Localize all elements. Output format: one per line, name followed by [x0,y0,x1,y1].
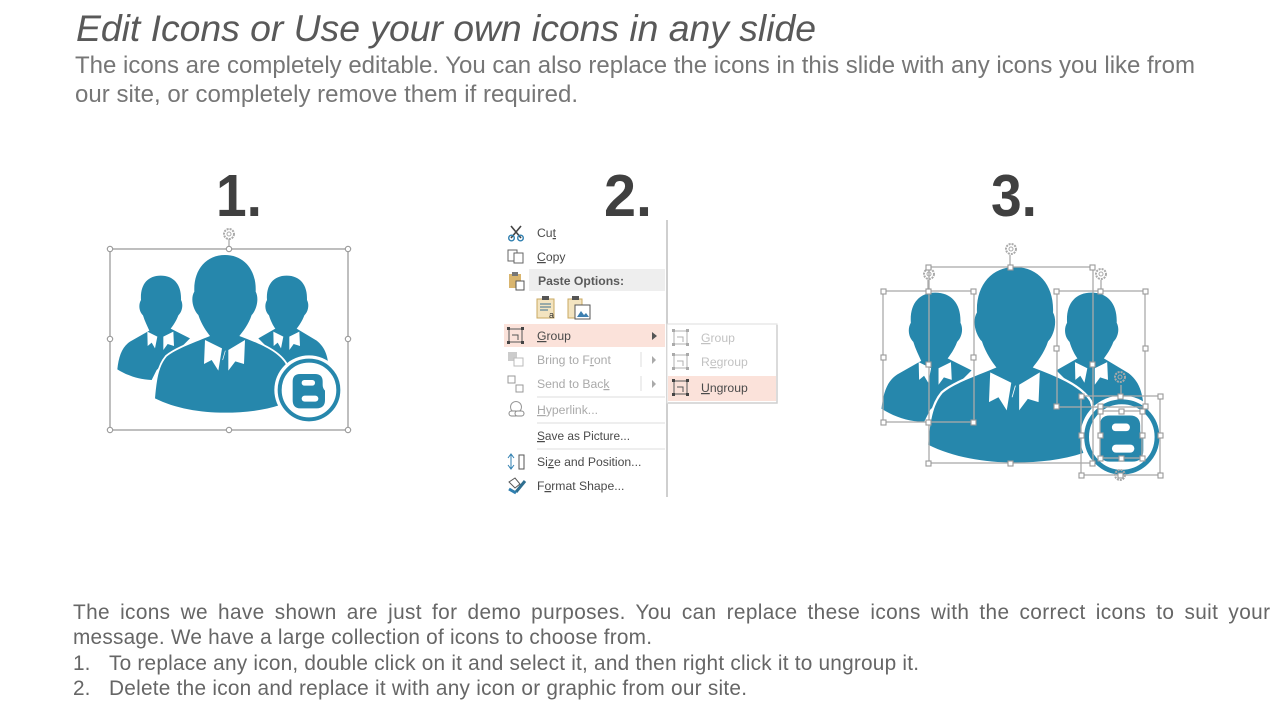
menu item: cut: Cut [537,226,557,240]
step number 1: 1. [216,163,262,229]
instructions text block: The icons we have shown are just for demo purposes. You can replace these icons with the correct icons to suit your [73,601,1270,624]
menu item: size and position: Size and Position... [537,455,641,469]
menu item: hyperlink [509,402,598,417]
menu item: bring to front: Bring to Front [537,353,611,367]
menu item: copy: Copy [537,250,566,264]
submenu item: ungroup: Ungroup [701,381,748,395]
context menu screenshot [504,220,777,497]
menu item: hyperlink: Hyperlink... [537,403,598,417]
instructions text block: message. We have a large collection of icons to choose from. [73,626,652,649]
menu item: save as picture: Save as Picture... [537,429,630,443]
icon: paste clipboard [509,272,524,290]
menu item: format shape: Format Shape... [537,479,624,493]
icon: paste options buttons: a [549,310,554,320]
menu item: cut [509,226,557,241]
instructions text block: 2. [73,677,90,700]
menu item: send to back: Send to Back [537,377,610,391]
instructions text block [73,601,1270,700]
subtitle text block: our site, or completely remove them if required. [75,81,578,108]
title: Edit Icons or Use your own icons in any slide [76,7,816,49]
instructions text block: To replace any icon, double click on it and select it, and then right click it to ungroup it. [109,652,919,675]
paste options row: Paste Options: [538,274,624,288]
submenu item: group: Group [701,331,735,345]
menu item: copy [508,250,566,264]
menu item: bring to front [508,352,656,367]
group row highlight: Group [537,329,571,343]
instructions text block: 1. [73,652,90,675]
step number 2: 2. [604,163,652,229]
submenu: group options [667,324,777,403]
group row highlight [504,324,665,347]
icon: ungrouped team with separate selection boxes [881,244,1163,480]
submenu item: regroup: Regroup [701,355,748,369]
subtitle text block [75,52,1195,108]
menu item: send to back [508,376,656,392]
instructions text block: Delete the icon and replace it with any icon or graphic from our site. [109,677,747,700]
paste options row [529,269,665,291]
subtitle text block: The icons are completely editable. You can also replace the icons in this slide with any icons you like from [75,52,1195,79]
icon: paste options buttons [537,296,590,320]
icon: business team with blogger badge, selected as one picture [107,229,351,433]
step number 3: 3. [991,163,1037,229]
